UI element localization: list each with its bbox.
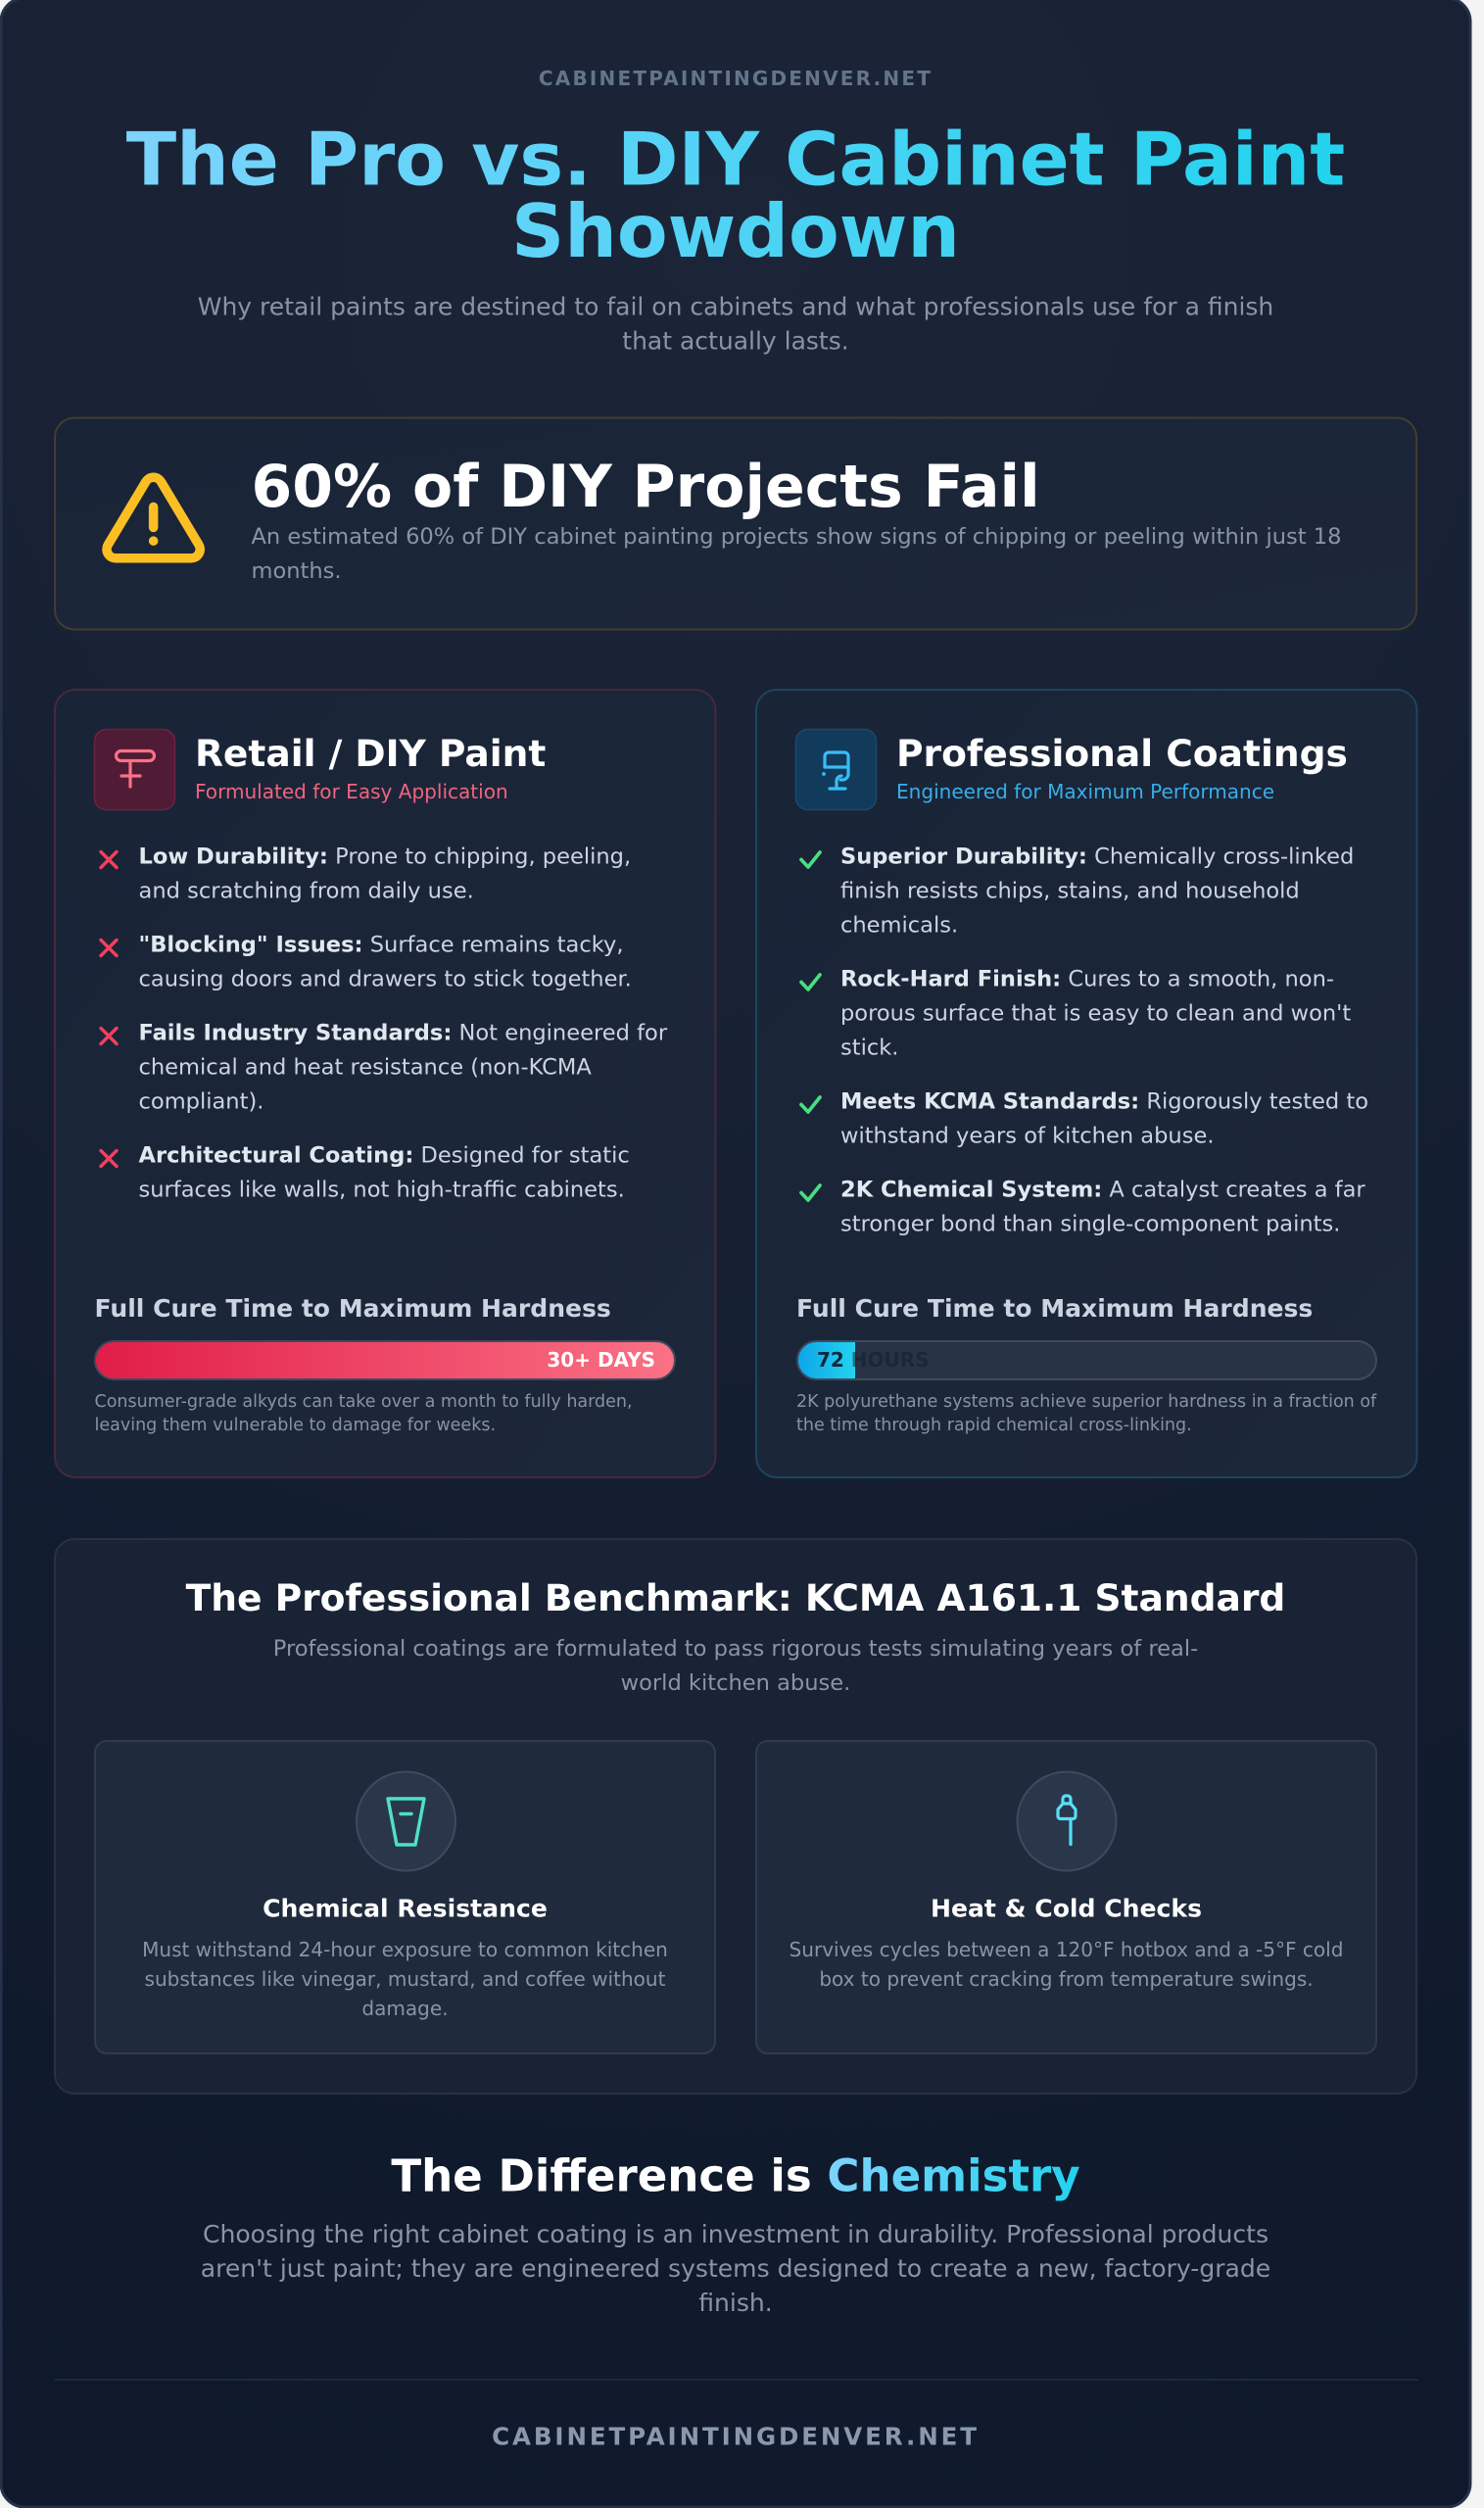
card title: Chemical Resistance <box>263 1895 548 1922</box>
panel: retail DIY paint <box>55 690 715 1477</box>
item: rock-hard finish: porous surface that is easy to clean and won't <box>840 1001 1351 1027</box>
item: superior durability <box>840 844 1354 939</box>
cure time note: Consumer-grade alkyds can take over a month to fully harden, <box>94 1392 633 1412</box>
item: architectural coating <box>139 1142 630 1203</box>
alert heading: 60% of DIY Projects Fail <box>251 453 1040 521</box>
cure time heading: Full Cure Time to Maximum Hardness <box>796 1294 1313 1323</box>
icon: paint roller <box>94 729 174 809</box>
item: 2K chemical: stronger bond than single-component paints. <box>840 1211 1340 1236</box>
icon: spray gun <box>795 729 876 809</box>
icon: check <box>801 852 820 867</box>
list: benefits <box>801 844 1368 1236</box>
cure time note: 2K polyurethane systems achieve superior hardness in a fraction of <box>796 1392 1377 1412</box>
cure time note: the time through rapid chemical cross-linking. <box>796 1416 1192 1435</box>
item: blocking: "Blocking" Issues: Surface remains tacky, <box>139 933 623 958</box>
card description: damage. <box>361 1997 449 2020</box>
card description: Survives cycles between a 120°F hotbox and a -5°F cold <box>790 1938 1343 1961</box>
item: 2K chemical <box>840 1178 1365 1236</box>
item: architectural coating: Architectural Coating: Designed for static <box>139 1142 630 1168</box>
item: superior durability: chemicals. <box>840 913 958 939</box>
footer site name: CABINETPAINTINGDENVER.NET <box>492 2422 980 2451</box>
item: low durability: and scratching from daily use. <box>139 878 474 903</box>
icon: check <box>801 1185 820 1200</box>
item: blocking <box>139 933 632 991</box>
item: architectural coating: surfaces like walls, not high-traffic cabinets. <box>139 1178 625 1203</box>
conclusion heading: The Difference is Chemistry <box>391 2149 1080 2202</box>
panel heading: Retail / DIY Paint <box>195 732 546 775</box>
card description: substances like vinegar, mustard, and coffee without <box>145 1967 666 1991</box>
item: fails standards: compliant). <box>139 1089 263 1115</box>
cure time note <box>94 1392 633 1435</box>
card description <box>142 1938 668 2020</box>
item: meets KCMA <box>840 1089 1368 1148</box>
benchmark description: Professional coatings are formulated to pass rigorous tests simulating years of real- <box>273 1636 1198 1662</box>
cure time note <box>796 1392 1377 1435</box>
main title: Showdown <box>511 188 960 274</box>
benchmark description: world kitchen abuse. <box>621 1670 850 1696</box>
item: superior durability: finish resists chips, stains, and household <box>840 878 1300 903</box>
benchmark description <box>273 1636 1198 1696</box>
item: fails standards: Fails Industry Standards: Not engineered for <box>139 1021 668 1046</box>
panel subheading: Engineered for Maximum Performance <box>896 780 1274 803</box>
icon: cross <box>101 852 117 868</box>
card description <box>790 1938 1343 1991</box>
alert description: months. <box>251 558 342 584</box>
alert description: An estimated 60% of DIY cabinet painting projects show signs of chipping or peeling within just 18 <box>251 524 1342 550</box>
panel: 60% alert <box>55 417 1416 629</box>
item: meets KCMA: withstand years of kitchen abuse. <box>840 1123 1215 1148</box>
conclusion text: aren't just paint; they are engineered systems designed to create a new, factory-grade <box>201 2254 1270 2283</box>
item: fails standards: chemical and heat resistance (non-KCMA <box>139 1054 592 1080</box>
main title: The Pro vs. DIY Cabinet Paint <box>126 116 1345 202</box>
bar: 30+ days: 30+ DAYS <box>547 1348 655 1372</box>
item: meets KCMA: Meets KCMA Standards: Rigorously tested to <box>840 1089 1368 1115</box>
item: 2K chemical: 2K Chemical System: A catalyst creates a far <box>840 1178 1365 1203</box>
icon: beaker <box>357 1771 455 1871</box>
item: low durability: Low Durability: Prone to chipping, peeling, <box>139 844 631 870</box>
item: fails standards <box>139 1021 668 1115</box>
list: failures <box>101 844 668 1203</box>
subtitle <box>198 292 1273 355</box>
icon: thermometer <box>1017 1771 1117 1871</box>
icon: check <box>801 975 820 989</box>
conclusion text <box>201 2220 1270 2317</box>
conclusion text: finish. <box>698 2289 773 2317</box>
icon: cross <box>101 1029 117 1044</box>
benchmark heading: The Professional Benchmark: KCMA A161.1 Standard <box>186 1576 1285 1619</box>
item: rock-hard finish: Rock-Hard Finish: Cures to a smooth, non- <box>840 966 1334 991</box>
card title: Heat & Cold Checks <box>931 1895 1202 1922</box>
bar: 72 hours: 72 HOURS <box>817 1348 930 1372</box>
conclusion <box>201 2149 1270 2317</box>
item: rock-hard finish <box>840 966 1351 1060</box>
item: rock-hard finish: stick. <box>840 1035 898 1060</box>
panel: professional coatings <box>756 690 1416 1477</box>
site label: CABINETPAINTINGDENVER.NET <box>539 67 933 90</box>
card: chemical resistance <box>95 1741 715 2053</box>
cure time heading: Full Cure Time to Maximum Hardness <box>94 1294 611 1323</box>
card: heat and cold checks <box>756 1741 1376 2053</box>
subtitle: that actually lasts. <box>622 327 849 355</box>
alert description <box>251 524 1342 584</box>
conclusion text: Choosing the right cabinet coating is an investment in durability. Professional products <box>203 2220 1269 2248</box>
subtitle: Why retail paints are destined to fail on cabinets and what professionals use for a finish <box>198 292 1273 321</box>
item: superior durability: Superior Durability: Chemically cross-linked <box>840 844 1354 870</box>
card description: box to prevent cracking from temperature swings. <box>819 1967 1314 1991</box>
bar: 72 hours <box>797 1341 1376 1379</box>
icon: check <box>801 1097 820 1112</box>
panel: KCMA benchmark <box>55 1539 1416 2094</box>
header <box>126 67 1345 355</box>
item: low durability <box>139 844 631 903</box>
cure time note: leaving them vulnerable to damage for weeks. <box>94 1416 496 1435</box>
icon: cross <box>101 1150 117 1166</box>
item: blocking: causing doors and drawers to stick together. <box>139 966 632 991</box>
bar: 30+ days <box>95 1341 675 1379</box>
panel heading: Professional Coatings <box>896 732 1348 775</box>
icon: warning triangle <box>107 477 200 558</box>
main title <box>126 116 1345 274</box>
panel subheading: Formulated for Easy Application <box>195 780 508 803</box>
card description: Must withstand 24-hour exposure to common kitchen <box>142 1938 668 1961</box>
icon: cross <box>101 940 117 956</box>
